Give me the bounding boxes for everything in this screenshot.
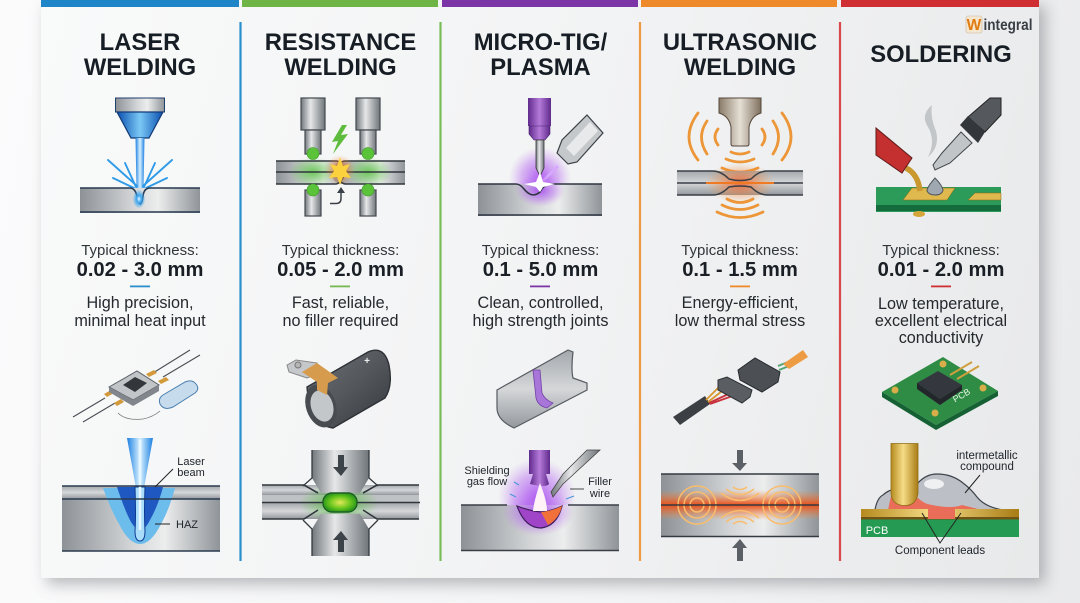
icon: laser head and sparks [80, 98, 200, 213]
column: micro-TIG plasma: Typical thickness: [482, 242, 599, 259]
diagram: solder joint [861, 444, 1019, 557]
label: intermetallic compound: compound [960, 461, 1014, 473]
icon: circuit board: PCB [951, 386, 972, 404]
title: resistance welding: RESISTANCE [265, 29, 416, 56]
icon: circuit board [882, 357, 998, 430]
description: low thermal stress [675, 312, 805, 330]
text: typical thickness: Typical thickness: [81, 242, 199, 259]
label: HAZ: HAZ [176, 519, 198, 531]
diagram: TIG weld pool [461, 450, 619, 551]
label: intermetallic compound: intermetallic [956, 450, 1018, 462]
label: laser beam: Laser [177, 456, 205, 468]
title: laser welding: LASER [100, 29, 180, 56]
icon: battery with tab: + [364, 356, 370, 367]
column: micro-TIG plasma [461, 29, 619, 551]
icon: bent metal joint [497, 350, 587, 428]
logo: W [967, 17, 982, 34]
column: ultrasonic welding [661, 29, 819, 561]
diagram: solder joint: PCB [866, 525, 888, 537]
description: Fast, reliable, [292, 294, 389, 312]
label: filler wire: Filler [588, 476, 612, 488]
column: laser welding [62, 29, 220, 551]
logo: integral [984, 17, 1032, 34]
value: thickness range: 0.05 - 2.0 mm [277, 259, 404, 281]
column dividers [240, 22, 840, 561]
description: minimal heat input [74, 312, 206, 330]
title: micro-TIG plasma: PLASMA [490, 54, 591, 81]
diagram: resistance nugget [262, 450, 420, 556]
icon: TIG torch [478, 98, 603, 216]
value: thickness range: 0.01 - 2.0 mm [878, 259, 1004, 281]
value: thickness range: 0.02 - 3.0 mm [77, 259, 203, 281]
label: shielding gas flow: gas flow [467, 476, 507, 488]
description: Clean, controlled, [478, 294, 603, 312]
diagram: ultrasonic interface [661, 450, 819, 561]
icon: micro electronic module [73, 350, 200, 422]
column: soldering [861, 41, 1019, 557]
value: thickness range: 0.1 - 1.5 mm [682, 259, 798, 281]
description: excellent electrical [875, 312, 1007, 330]
top colour bars [41, 0, 1039, 7]
icon: battery with tab [287, 350, 390, 432]
label: filler wire: wire [589, 488, 610, 500]
logo [966, 16, 1032, 34]
title: micro-TIG plasma: MICRO-TIG/ [474, 29, 608, 56]
description: no filler required [282, 312, 399, 330]
title: ultrasonic welding: WELDING [684, 54, 796, 81]
column: resistance welding [262, 29, 420, 556]
diagram: laser beam and HAZ [62, 438, 220, 551]
description: high strength joints [473, 312, 608, 330]
column: soldering: Typical thickness: [882, 242, 1000, 259]
title: ultrasonic welding: ULTRASONIC [663, 29, 817, 56]
description: Low temperature, [878, 295, 1004, 313]
title: soldering: SOLDERING [870, 41, 1012, 68]
icon: soldering iron and PCB [876, 98, 1001, 217]
description: Energy-efficient, [682, 294, 798, 312]
description: conductivity [899, 329, 984, 347]
label: component leads: Component leads [895, 545, 985, 557]
value: thickness range: 0.1 - 5.0 mm [483, 259, 598, 281]
icon: wire connector [673, 350, 808, 425]
icon: resistance spot electrodes [276, 98, 405, 216]
label: laser beam: beam [177, 467, 205, 479]
title: laser welding: WELDING [84, 54, 196, 81]
column: resistance welding: Typical thickness: [282, 242, 399, 259]
title: resistance welding: WELDING [284, 54, 397, 81]
column: ultrasonic welding: Typical thickness: [681, 242, 799, 259]
label: shielding gas flow: Shielding [464, 465, 510, 477]
description: High precision, [86, 294, 194, 312]
icon: ultrasonic horn [677, 98, 803, 218]
